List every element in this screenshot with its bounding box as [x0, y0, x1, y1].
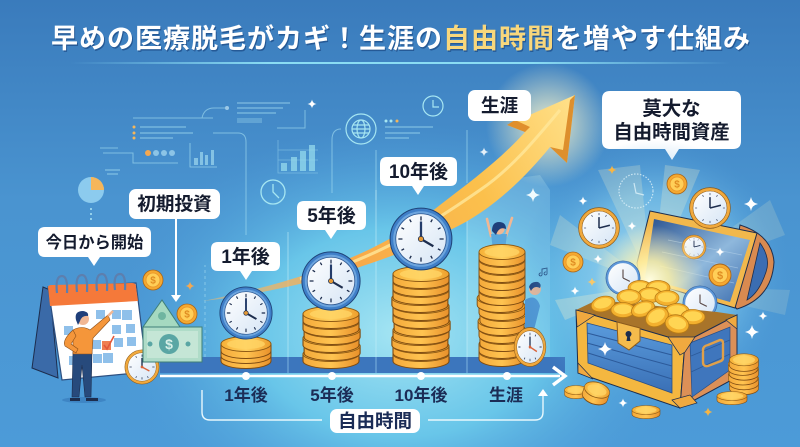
callout: 1 year	[211, 242, 280, 280]
arrow: initial investment	[171, 219, 181, 302]
callout: 10 years: 10年後	[389, 160, 448, 183]
clock: lifetime gold clock	[514, 328, 546, 366]
icon: small outline clock	[423, 96, 443, 116]
callout: initial investment	[129, 189, 220, 219]
callout: initial investment: 初期投資	[137, 194, 212, 214]
background line graphics	[100, 103, 467, 235]
icon: small bar chart	[190, 143, 217, 167]
chest opening	[576, 300, 737, 342]
callout: huge free time asset	[602, 91, 741, 160]
decorative dots and sparkles	[132, 100, 540, 290]
axis labels: 生涯	[489, 386, 523, 405]
free time bracket	[202, 389, 548, 420]
clock: small gold clock	[125, 350, 159, 384]
timeline panels	[160, 175, 565, 373]
treasure chest	[576, 211, 774, 408]
coin heap	[589, 280, 705, 336]
callout: huge free time asset: 自由時間資産	[613, 122, 730, 144]
callout: 5 years	[297, 201, 366, 239]
title underline	[70, 62, 730, 64]
axis labels: 5年後	[310, 385, 354, 405]
stack: 1 year coins and clock	[220, 287, 272, 368]
callout: today: 今日から開始	[46, 233, 144, 252]
stack: 5 years coins and clock	[302, 252, 360, 368]
stack: 10 years coins and clock	[390, 208, 452, 368]
icon: globe	[346, 114, 376, 144]
coin inside lid	[709, 264, 731, 286]
icon: outline clock	[261, 180, 285, 204]
person: man beside coins	[524, 268, 547, 340]
title: 早めの医療脱毛がカギ！生涯の自由時間を増やす仕組み	[51, 23, 751, 54]
callout: today	[38, 227, 151, 266]
callout: lifetime	[468, 90, 531, 121]
callout: 5 years: 5年後	[307, 204, 356, 227]
calendar	[32, 274, 147, 380]
icon: large bar chart	[278, 140, 318, 173]
icon: coins near money	[143, 270, 197, 324]
floating coins	[563, 174, 687, 272]
axis labels: 1年後	[224, 385, 268, 405]
callout: huge free time asset: 莫大な	[642, 98, 701, 120]
chest lock	[617, 322, 640, 350]
clocks in the heap	[606, 261, 717, 320]
chest side	[680, 315, 737, 408]
chest lid	[637, 211, 774, 309]
stack: lifetime coins	[477, 244, 526, 366]
icon: pie chart	[78, 177, 104, 220]
callout: 1 year: 1年後	[221, 245, 270, 268]
light rays from chest	[520, 140, 790, 410]
ground coins	[564, 379, 747, 419]
money bills	[143, 300, 202, 362]
floating clocks	[579, 174, 730, 248]
clock inside lid	[682, 235, 706, 259]
callout: lifetime: 生涯	[481, 95, 518, 116]
chest corners	[576, 310, 737, 408]
person: cheering woman	[487, 218, 512, 250]
opening glow	[595, 225, 705, 335]
label: free time: 自由時間	[338, 410, 412, 432]
timeline axis	[160, 367, 565, 385]
money bills: $	[165, 336, 173, 352]
axis labels: 10年後	[395, 385, 447, 405]
callout: 10 years	[380, 157, 457, 195]
axis labels	[224, 385, 523, 405]
chest sparkles	[570, 166, 768, 416]
growth arrow	[203, 63, 610, 301]
title: 早めの医療脱毛がカギ！生涯の自由時間を増やす仕組み	[52, 24, 752, 56]
side coin stack	[728, 354, 758, 395]
person: pointing man	[62, 311, 113, 403]
chest front	[576, 310, 685, 408]
